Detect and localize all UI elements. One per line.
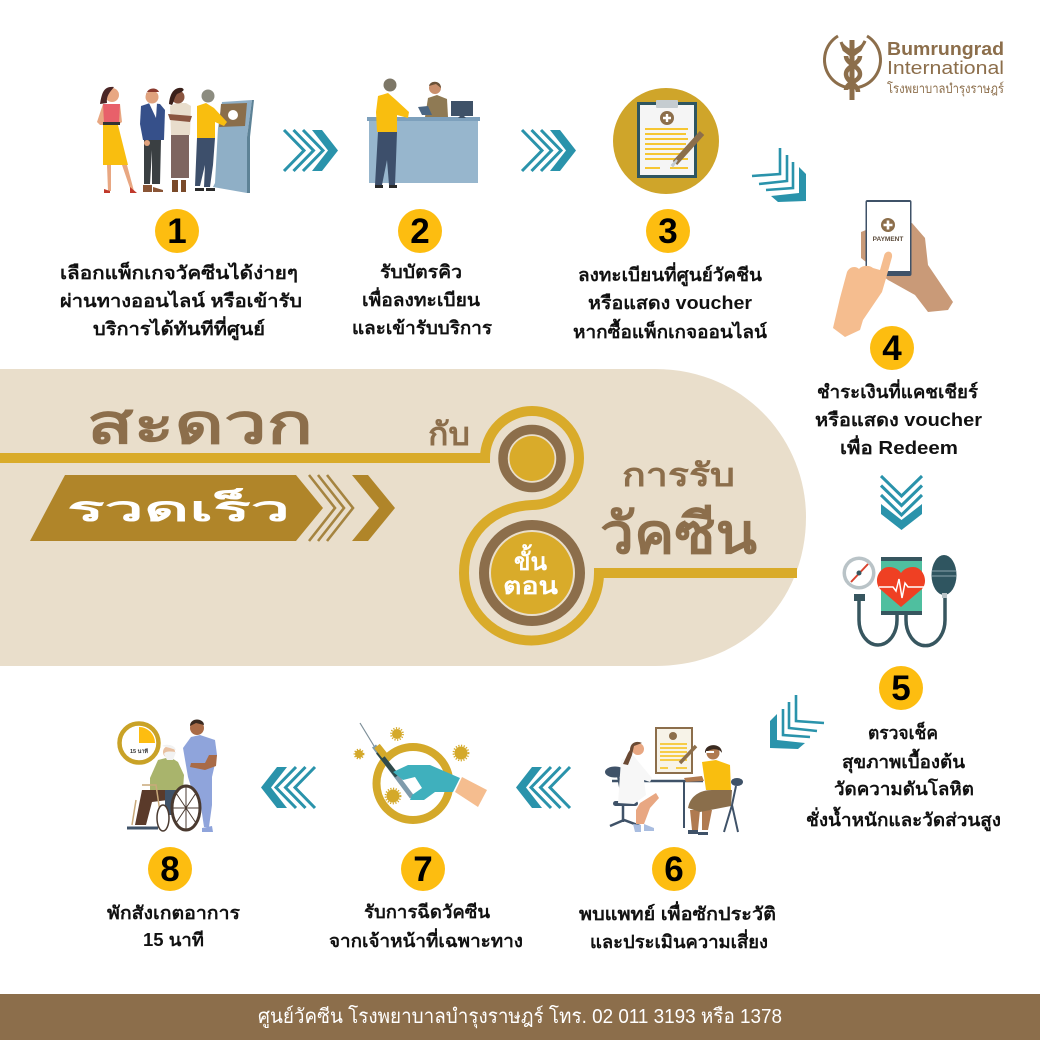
illustration: clipboard <box>613 88 719 194</box>
text: step 4 <box>815 379 982 458</box>
step 3 <box>573 88 768 342</box>
step 7 <box>329 723 523 951</box>
illustration: blood pressure monitor <box>842 555 956 646</box>
label: วัคซีน: วัคซีน <box>600 502 757 565</box>
text: step 2 <box>352 262 492 338</box>
upper ring <box>503 430 561 488</box>
number badge 6: 6 <box>664 850 684 889</box>
text: step 2: และเข้ารับบริการ <box>352 318 492 338</box>
lower ring with label: ตอน <box>503 573 559 600</box>
ribbon: รวดเร็ว: รวดเร็ว <box>67 487 290 529</box>
text: step 3: หากซื้อแพ็กเกจออนไลน์ <box>573 318 768 342</box>
illustration: vaccine injection <box>354 723 487 820</box>
logo: Bumrungrad International: Bumrungrad <box>887 39 1004 59</box>
arrow 7 to 8 <box>261 767 315 808</box>
number badge 1: 1 <box>167 212 187 251</box>
step 5 <box>806 555 1001 832</box>
illustration: people at kiosk <box>97 87 254 193</box>
text: step 5: ชั่งน้ำหนักและวัดส่วนสูง <box>806 806 1001 832</box>
number badge 5: 5 <box>891 669 911 708</box>
step 2 <box>352 78 492 338</box>
number badge 8 <box>148 847 192 891</box>
number badge 3: 3 <box>658 212 678 251</box>
text: step 3: ลงทะเบียนที่ศูนย์วัคชีน <box>578 262 763 287</box>
text: step 7: รับการฉีดวัคซีน <box>364 902 491 922</box>
number badge 8: 8 <box>160 850 180 889</box>
step 8 <box>107 720 240 950</box>
text: step 7: จากเจ้าหน้าที่เฉพาะทาง <box>329 928 523 951</box>
number badge 2 <box>398 209 442 253</box>
text: step 8 <box>107 903 240 950</box>
arrow 5 to 6 <box>770 695 824 749</box>
logo: Bumrungrad International <box>825 36 1004 100</box>
label: การรับ: การรับ <box>622 457 735 493</box>
number badge 1 <box>155 209 199 253</box>
number badge 5 <box>879 666 923 710</box>
text: step 4: เพื่อ Redeem <box>840 435 958 458</box>
number badge 7: 7 <box>413 850 433 889</box>
heading: สะดวก: สะดวก <box>87 393 313 455</box>
illustration: doctor consultation <box>605 727 743 835</box>
step 6 <box>579 727 776 952</box>
text: step 7 <box>329 902 523 951</box>
text: step 3: หรือแสดง voucher <box>588 293 752 313</box>
step 1 <box>60 87 302 341</box>
text: step 2: เพื่อลงทะเบียน <box>362 287 481 310</box>
ribbon: รวดเร็ว <box>30 475 395 541</box>
arrow 3 to 4 <box>752 148 806 202</box>
text: step 6 <box>579 901 776 952</box>
illustration: rest with wheelchair and clock: 15 นาที <box>130 748 148 755</box>
text: step 5 <box>806 721 1001 832</box>
text: step 8: 15 นาที <box>143 930 204 950</box>
text: step 8: พักสังเกตอาการ <box>107 903 240 923</box>
step 4 <box>815 200 982 458</box>
text: step 3 <box>573 262 768 342</box>
illustration: rest with wheelchair and clock <box>120 720 217 832</box>
lower ring with label: ขั้น <box>514 543 548 576</box>
number badge 3 <box>646 209 690 253</box>
number badge 4 <box>870 326 914 370</box>
logo: Bumrungrad International: International <box>887 58 1004 78</box>
arrow 1 to 2 <box>284 130 338 171</box>
text: step 1: ผ่านทางออนไลน์ หรือเข้ารับ <box>60 290 302 311</box>
text: step 6: พบแพทย์ เพื่อซักประวัติ <box>579 901 776 924</box>
number badge 6 <box>652 847 696 891</box>
lower ring with label <box>484 525 580 621</box>
gold connector line <box>0 411 797 640</box>
illustration: registration desk <box>367 78 480 188</box>
footer bar: ศูนย์วัคซีน โรงพยาบาลบำรุงราษฎร์ โทร. 02 011 3193 หรือ 1378 <box>258 1005 782 1029</box>
text: step 1: บริการได้ทันทีที่ศูนย์ <box>93 316 265 341</box>
text: step 1 <box>60 261 302 341</box>
central banner <box>0 369 806 666</box>
footer bar <box>0 994 1040 1040</box>
text: step 5: ตรวจเช็ค <box>868 721 938 743</box>
text: step 6: และประเมินความเสี่ยง <box>590 929 768 952</box>
number badge 7 <box>401 847 445 891</box>
number badge 4: 4 <box>882 329 902 368</box>
text: step 1: เลือกแพ็กเกจวัคซีนได้ง่ายๆ <box>60 261 298 283</box>
illustration: hand with phone <box>833 200 953 337</box>
text: step 4: หรือแสดง voucher <box>815 410 982 430</box>
logo: Bumrungrad International: โรงพยาบาลบำรุงราษฎร์ <box>887 81 1004 97</box>
text: step 4: ชำระเงินที่แคชเชียร์ <box>817 379 978 402</box>
arrow 2 to 3 <box>522 130 576 171</box>
arrow 4 to 5 <box>881 476 922 530</box>
text: step 5: วัดความดันโลหิต <box>834 778 974 799</box>
arrow 6 to 7 <box>516 767 570 808</box>
banner background <box>0 369 806 666</box>
illustration: hand with phone: PAYMENT <box>873 236 903 243</box>
number badge 2: 2 <box>410 212 430 251</box>
text: step 2: รับบัตรคิว <box>380 262 462 282</box>
text: step 5: สุขภาพเบื้องต้น <box>842 748 966 774</box>
label: กับ: กับ <box>428 416 470 452</box>
